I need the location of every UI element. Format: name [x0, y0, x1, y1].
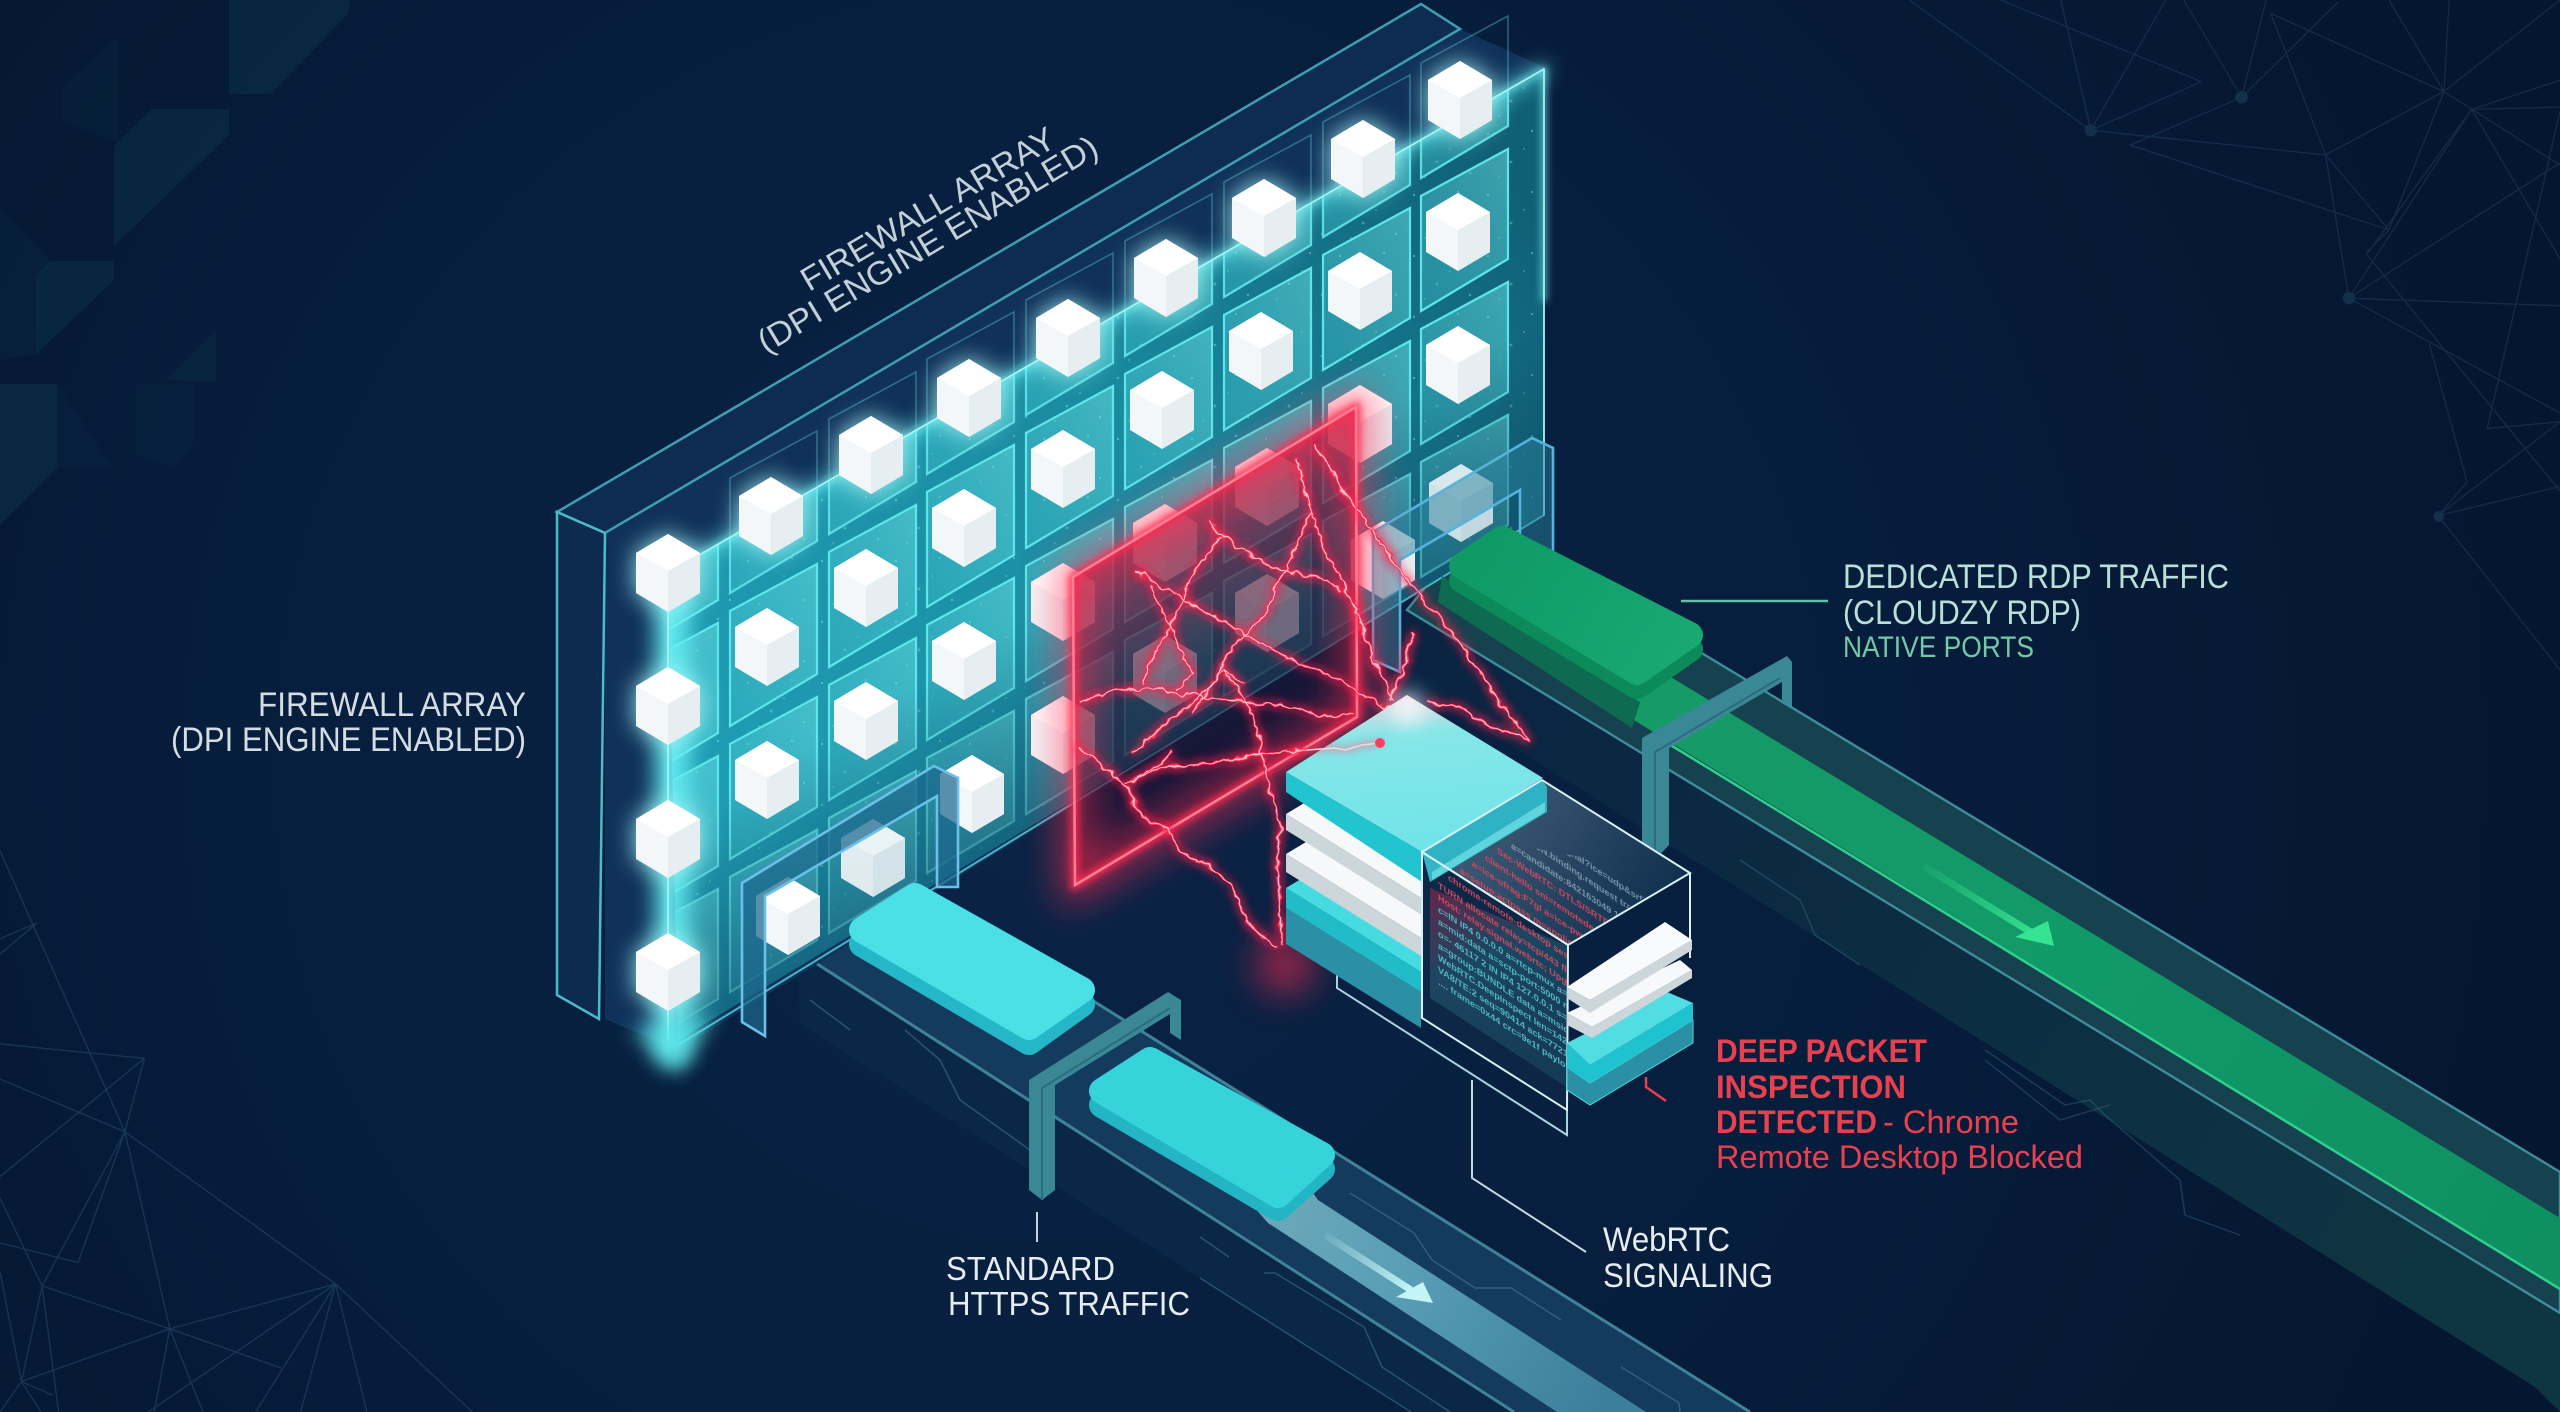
green track top surface — [1407, 519, 2560, 1313]
label: webrtc signaling: WebRTC — [1603, 1221, 1730, 1259]
cyan packet one — [862, 896, 1082, 1042]
packet side — [862, 909, 1082, 1042]
cyan traffic track — [797, 880, 1750, 1412]
inspected packet data text: TURN allocate relay=tcp/443 flag=DPI-MATCH — [1438, 881, 1632, 1019]
wall lower shading — [668, 69, 1544, 1040]
red frame tint — [1073, 407, 1357, 885]
firewall wall — [557, 4, 1544, 1070]
right layer dark teal — [1567, 1020, 1693, 1105]
inspected packet data text: Host: relay.signal.webrtc; Upgrade: websock — [1438, 893, 1630, 1029]
layer white one — [1286, 802, 1421, 914]
label: deep packet inspection — [1646, 1033, 2083, 1175]
inspected packet data text: a=ice-ufrag:F7gI a=ice-pwd:x9cCMxKwnpGqRf8 — [1472, 859, 1677, 1004]
label: firewall array left: FIREWALL ARRAY — [258, 686, 526, 724]
label: dedicated rdp traffic: NATIVE PORTS — [1843, 631, 2034, 664]
background polygons top left — [0, 0, 350, 525]
inspected packet data text: .... frame=0x44 crc=9e1f payload=bundle OD — [1438, 977, 1627, 1111]
packet base shadow — [1438, 576, 1640, 728]
top slab — [1286, 695, 1547, 882]
cyan packet two — [1102, 1060, 1322, 1208]
green track side face — [1403, 610, 2560, 1412]
right layer white one — [1567, 922, 1692, 1013]
layer teal — [1286, 876, 1421, 992]
inspected packet data text: WebRTC.DeepInspect len=1428 proto=17 ok 008 — [1438, 953, 1644, 1098]
inspected packet data text: GET /signal?ice=udp&srflx=0x7f2c /FB0cTsa9 — [1535, 825, 1730, 964]
packet top — [1102, 1060, 1322, 1195]
red cracks — [1080, 445, 1530, 948]
label: webrtc signaling — [1472, 1080, 1773, 1295]
green lane bright edge — [1669, 744, 2560, 1289]
firewall cubes inner — [735, 193, 1493, 955]
label: standard https traffic — [946, 1212, 1190, 1322]
wall speckle — [668, 69, 1544, 1040]
red frame dark interior — [1073, 407, 1357, 885]
glass top interior — [1421, 781, 1691, 946]
firewall cubes glowing — [636, 61, 1492, 1011]
wall entry gate green lane — [1373, 438, 1553, 672]
cyan lit strip — [1230, 1160, 1646, 1412]
red frame line — [1073, 407, 1357, 885]
glow bands — [630, 69, 1544, 1070]
leader line — [1681, 600, 1828, 602]
inspected packet data text: o=- 46117 2 IN IP4 127.0.0.1 s=- t=0 0 a=gr — [1438, 929, 1615, 1055]
inspected packet data text: Sec-WebRTC: DTLS/SRTP fingerprint sha-256 x — [1497, 846, 1700, 990]
green lane arrow — [1923, 866, 2054, 946]
inspected packet data text: client-hello sni=remotedesktop.google.com a — [1485, 853, 1679, 990]
label: standard https traffic: STANDARD — [946, 1250, 1115, 1287]
label: deep packet inspection: INSPECTION — [1716, 1069, 1906, 1105]
right layer white two — [1567, 960, 1692, 1038]
glass box — [1422, 780, 1690, 1110]
label: dedicated rdp traffic — [1681, 558, 2229, 664]
inspected packet data text: a=setup:actpass m=application 9 DTLS/SCTP 5 — [1460, 866, 1662, 1009]
layer white two — [1286, 842, 1421, 956]
label: dedicated rdp traffic: DEDICATED RDP TRAFFIC — [1843, 558, 2229, 596]
red inspection frame — [1073, 407, 1357, 885]
cyan lane gate — [1029, 992, 1181, 1200]
background network top right — [1909, 0, 2560, 670]
glass left interior — [1430, 888, 1568, 1088]
green packet — [1438, 539, 1690, 728]
inspected packet data text: a=group:BUNDLE data a=msid-semantic:WMS abc — [1438, 941, 1654, 1093]
label: dedicated rdp traffic: (CLOUDZY RDP) — [1843, 594, 2081, 632]
wall teal glass — [668, 69, 1544, 1040]
inspected packet data text: VA8/TE:2 seq=90414 ack=77210 win=65535 cc 0 — [1438, 965, 1641, 1109]
right layer teal — [1567, 992, 1693, 1083]
red impact glow — [1259, 939, 1311, 991]
inspected packet data text: a=candidate:842163049 1 udp 1677729535 typ — [1511, 841, 1706, 980]
cell fills — [631, 16, 1508, 1051]
inspected packet data text: c=IN IP4 0.0.0.0 a=rtcp-mux a=sendrecv 0090 — [1438, 905, 1630, 1041]
label: firewall array rotated: FIREWALL ARRAY — [794, 119, 1062, 298]
inspected packet data text: STUN.binding.request transport=udp ver=9 Lk — [1523, 833, 1721, 973]
cyan track edges — [797, 880, 1750, 1412]
impact glow on slab — [1392, 692, 1424, 724]
cyan track top surface — [797, 880, 1750, 1412]
packet top — [1462, 539, 1690, 672]
label: deep packet inspection: Remote Desktop Blocked — [1716, 1139, 2083, 1175]
wall top face — [557, 4, 1460, 533]
webrtc leader line — [1472, 1080, 1586, 1252]
wall entry gate cyan lane — [742, 766, 958, 1036]
https leader tick — [1036, 1212, 1038, 1242]
red frame halo — [1073, 407, 1357, 885]
label: deep packet inspection: DEEP PACKET — [1716, 1033, 1927, 1069]
label: firewall array left — [171, 686, 526, 759]
inspected packet data text — [1438, 844, 1644, 1067]
wall front plate — [605, 29, 1544, 1050]
red frame glow — [1073, 407, 1357, 885]
label: standard https traffic: HTTPS TRAFFIC — [948, 1285, 1190, 1322]
cyan lane arrow — [1325, 1235, 1433, 1303]
stack lower outline — [1337, 970, 1567, 1135]
inspected packet data text: chrome-remote-desktop session token 0x3fa9 — [1448, 873, 1644, 1012]
label: firewall array left: (DPI ENGINE ENABLED) — [171, 721, 526, 759]
red leader tick — [1646, 1077, 1666, 1101]
green lane — [1520, 634, 2560, 1289]
packet side — [1102, 1074, 1322, 1208]
packet top — [862, 896, 1082, 1027]
green track circuit traces — [1740, 860, 2240, 1235]
label: webrtc signaling: SIGNALING — [1603, 1257, 1773, 1295]
top row cell outlines — [730, 16, 1508, 593]
inspected packet data text: a=mid:data a=sctp-port:5000 max-size:262144 — [1438, 917, 1634, 1056]
cyan track circuit traces — [810, 1000, 1680, 1412]
red impact dot — [1375, 738, 1385, 748]
packet stack — [1286, 692, 1730, 1135]
green traffic track — [1403, 519, 2560, 1412]
crack to slab — [1307, 743, 1380, 750]
label: deep packet inspection: - Chrome — [1883, 1104, 2019, 1140]
label: deep packet inspection: DETECTED — [1716, 1104, 1877, 1140]
background network bottom left — [0, 851, 472, 1412]
label: firewall array rotated: (DPI ENGINE ENABLED) — [751, 128, 1104, 360]
packet side — [1462, 552, 1690, 686]
layer dark teal — [1286, 908, 1421, 1028]
cyan track side face — [797, 951, 1514, 1412]
green lane gate — [1642, 656, 1792, 860]
wall bottom edge — [678, 515, 1544, 1045]
wall left face — [557, 512, 605, 1019]
